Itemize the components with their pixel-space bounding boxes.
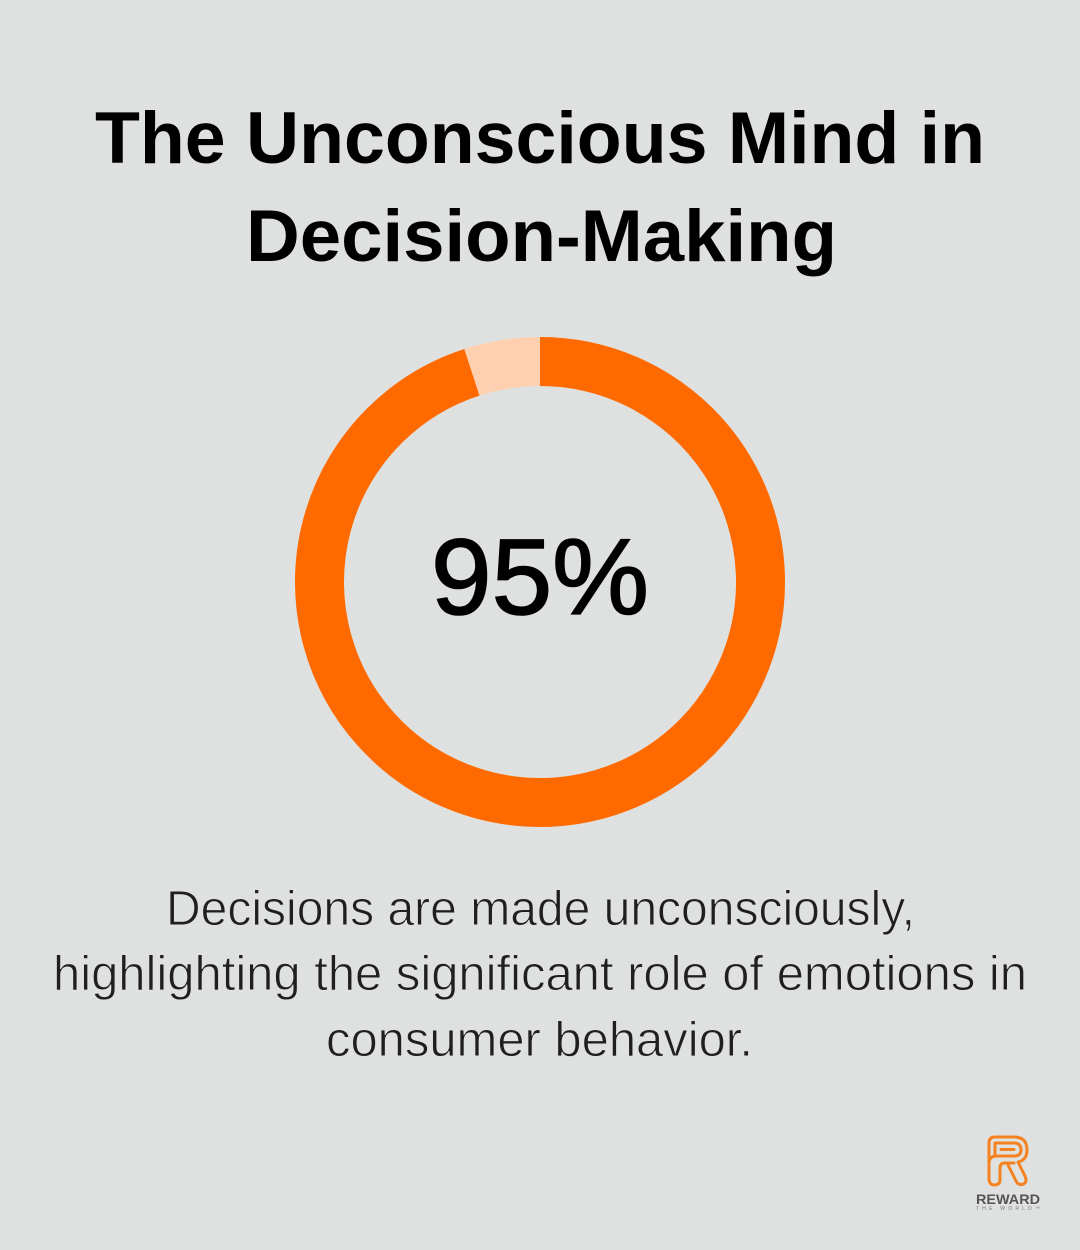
description text xyxy=(53,882,1027,1067)
description text: Decisions are made unconsciously, xyxy=(166,882,915,936)
description text: consumer behavior. xyxy=(326,1013,753,1067)
center value: 95% xyxy=(431,516,649,637)
title xyxy=(95,98,985,277)
donut chart: 95 percent xyxy=(319,362,760,802)
description text: highlighting the significant role of emotions in xyxy=(53,947,1027,1001)
title: Decision-Making xyxy=(246,196,837,277)
logo: Reward the World xyxy=(976,1137,1040,1212)
donut track: remaining 5 percent xyxy=(472,362,540,372)
logo tagline: THE WORLD™ xyxy=(976,1206,1040,1212)
title: The Unconscious Mind in xyxy=(95,98,985,179)
logo icon: orange R xyxy=(989,1137,1027,1185)
logo wordmark: REWARD xyxy=(976,1191,1040,1207)
donut value: 95 percent xyxy=(319,362,760,802)
